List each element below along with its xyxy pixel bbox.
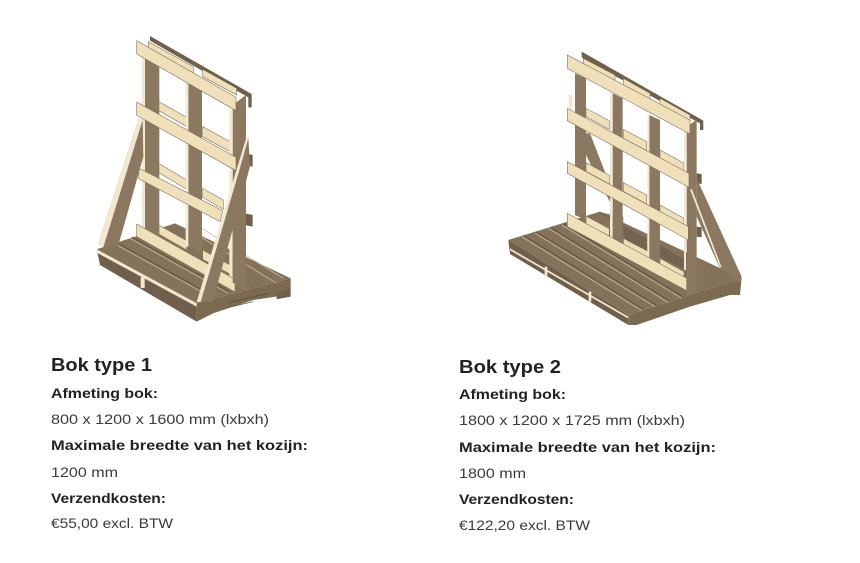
- pallet base: [97, 223, 291, 322]
- side brace: [690, 178, 742, 283]
- value: dimensions: 800 x 1200 x 1600 mm (lxbxh): [51, 411, 269, 427]
- value: dimensions: 1800 x 1200 x 1725 mm (lxbxh): [459, 412, 685, 428]
- back rails and rear brace: [569, 52, 703, 281]
- uprights: [142, 57, 246, 291]
- label: shipping: Verzendkosten:: [459, 491, 574, 507]
- heading: Bok type 2: [459, 357, 561, 377]
- pallet base: [508, 212, 742, 325]
- label: dimensions: Afmeting bok:: [51, 385, 158, 401]
- value: maximum width: 1800 mm: [459, 465, 526, 481]
- label: shipping: Verzendkosten:: [51, 490, 166, 506]
- text block: Bok type 2: [459, 357, 716, 533]
- illustration: wooden rack type 1: [97, 36, 291, 322]
- stencil marks: [228, 293, 268, 307]
- label: maximum width: Maximale breedte van het kozijn:: [459, 439, 716, 455]
- illustration: wooden rack type 2: [508, 52, 742, 325]
- heading: Bok type 1: [51, 355, 152, 375]
- label: maximum width: Maximale breedte van het kozijn:: [51, 437, 308, 453]
- value: maximum width: 1200 mm: [51, 464, 118, 480]
- uprights: [575, 73, 697, 295]
- text block: Bok type 1: [51, 355, 308, 531]
- front rails: [567, 55, 690, 291]
- braces: [98, 118, 250, 302]
- label: dimensions: Afmeting bok:: [459, 386, 566, 402]
- front rails: [137, 41, 236, 292]
- value: shipping: €55,00 excl. BTW: [51, 515, 174, 531]
- value: shipping: €122,20 excl. BTW: [459, 517, 591, 533]
- back rails: [148, 36, 253, 274]
